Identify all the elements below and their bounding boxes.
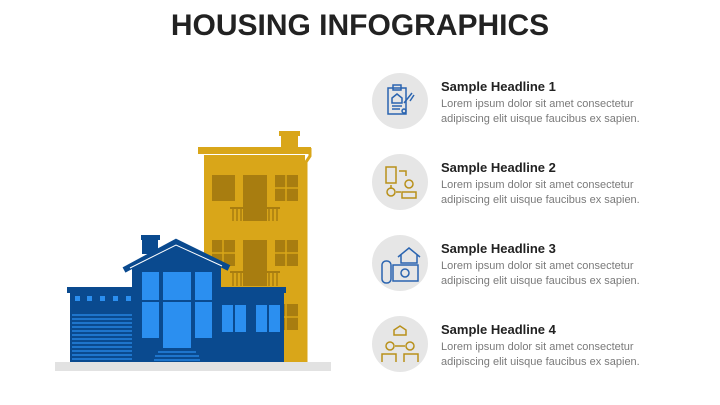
item 2: Lorem ipsum dolor sit amet consectetur [441,179,634,191]
item 3: Lorem ipsum dolor sit amet consectetur [441,260,634,272]
item 4 [372,316,640,372]
ground [55,362,331,371]
text: Sample Headline 1 [441,79,556,94]
blue house [67,235,286,362]
item 2 [372,154,640,210]
text: Sample Headline 3 [441,241,556,256]
item 4: Lorem ipsum dolor sit amet consectetur [441,341,634,353]
yellow apartment building [198,131,311,362]
item 1: adipiscing elit uisque faucibus ex sapien. [441,113,640,125]
icon: contract with key [372,73,428,129]
item 2: adipiscing elit uisque faucibus ex sapien. [441,194,640,206]
item 1: Lorem ipsum dolor sit amet consectetur [441,98,634,110]
item 3: adipiscing elit uisque faucibus ex sapien. [441,275,640,287]
item 4: adipiscing elit uisque faucibus ex sapien. [441,356,640,368]
text: Sample Headline 2 [441,160,556,175]
title: HOUSING INFOGRAPHICS [171,9,549,42]
item 3 [372,235,640,291]
icon: house money [372,235,428,291]
icon: building to person [372,154,428,210]
icon: people with house [372,316,428,372]
item 1 [372,73,640,129]
text: Sample Headline 4 [441,322,556,337]
